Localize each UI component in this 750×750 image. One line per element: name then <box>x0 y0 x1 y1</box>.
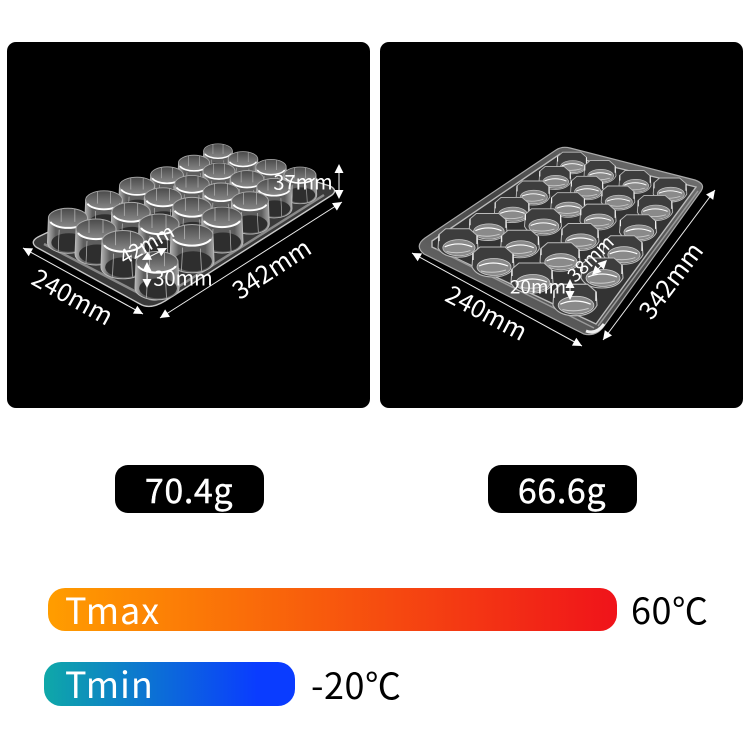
weight badge: left tray <box>115 465 264 513</box>
dimension arrow: 37mm height <box>334 164 344 199</box>
panel: right tray with shallow cavities <box>380 42 743 408</box>
bar: maximum temperature: Tmax <box>65 583 160 635</box>
dimension arrow: 42mm diameter <box>140 244 169 264</box>
dimension arrow: 20mm height <box>566 279 574 300</box>
label: 37mm: 37mm <box>273 166 333 196</box>
bar: minimum temperature: Tmin <box>65 657 154 709</box>
label: 342mm: 342mm <box>224 229 318 307</box>
label: 30mm: 30mm <box>153 262 213 292</box>
value: maximum temperature: 60℃ <box>631 583 708 635</box>
tray base: tall cup tray <box>33 152 335 306</box>
weight badge: left tray: 70.4g <box>145 464 233 513</box>
tray base: shallow tray <box>419 147 703 335</box>
label: 240mm: 240mm <box>26 259 120 333</box>
cavities grid <box>438 152 687 316</box>
label: 240mm: 240mm <box>440 275 534 349</box>
weight badge: right tray <box>488 465 637 513</box>
dimension arrow: 38mm diameter <box>589 257 610 278</box>
dimension arrow: 240mm <box>21 244 145 318</box>
cups grid <box>47 144 317 300</box>
dimension arrow: 30mm height <box>142 262 152 288</box>
bar: minimum temperature <box>44 662 295 706</box>
panel: left tray with tall cups <box>7 42 370 408</box>
dimension arrow: 240mm <box>410 249 584 350</box>
dimension arrow: 342mm <box>599 187 719 343</box>
weight badge: right tray: 66.6g <box>518 464 606 513</box>
label: 38mm: 38mm <box>561 229 619 287</box>
label: 42mm: 42mm <box>113 216 179 270</box>
label: 20mm: 20mm <box>510 272 566 300</box>
label: 342mm: 342mm <box>629 234 711 326</box>
value: minimum temperature: -20℃ <box>311 658 401 710</box>
bar: maximum temperature <box>48 588 617 631</box>
dimension arrow: 342mm <box>158 198 344 322</box>
